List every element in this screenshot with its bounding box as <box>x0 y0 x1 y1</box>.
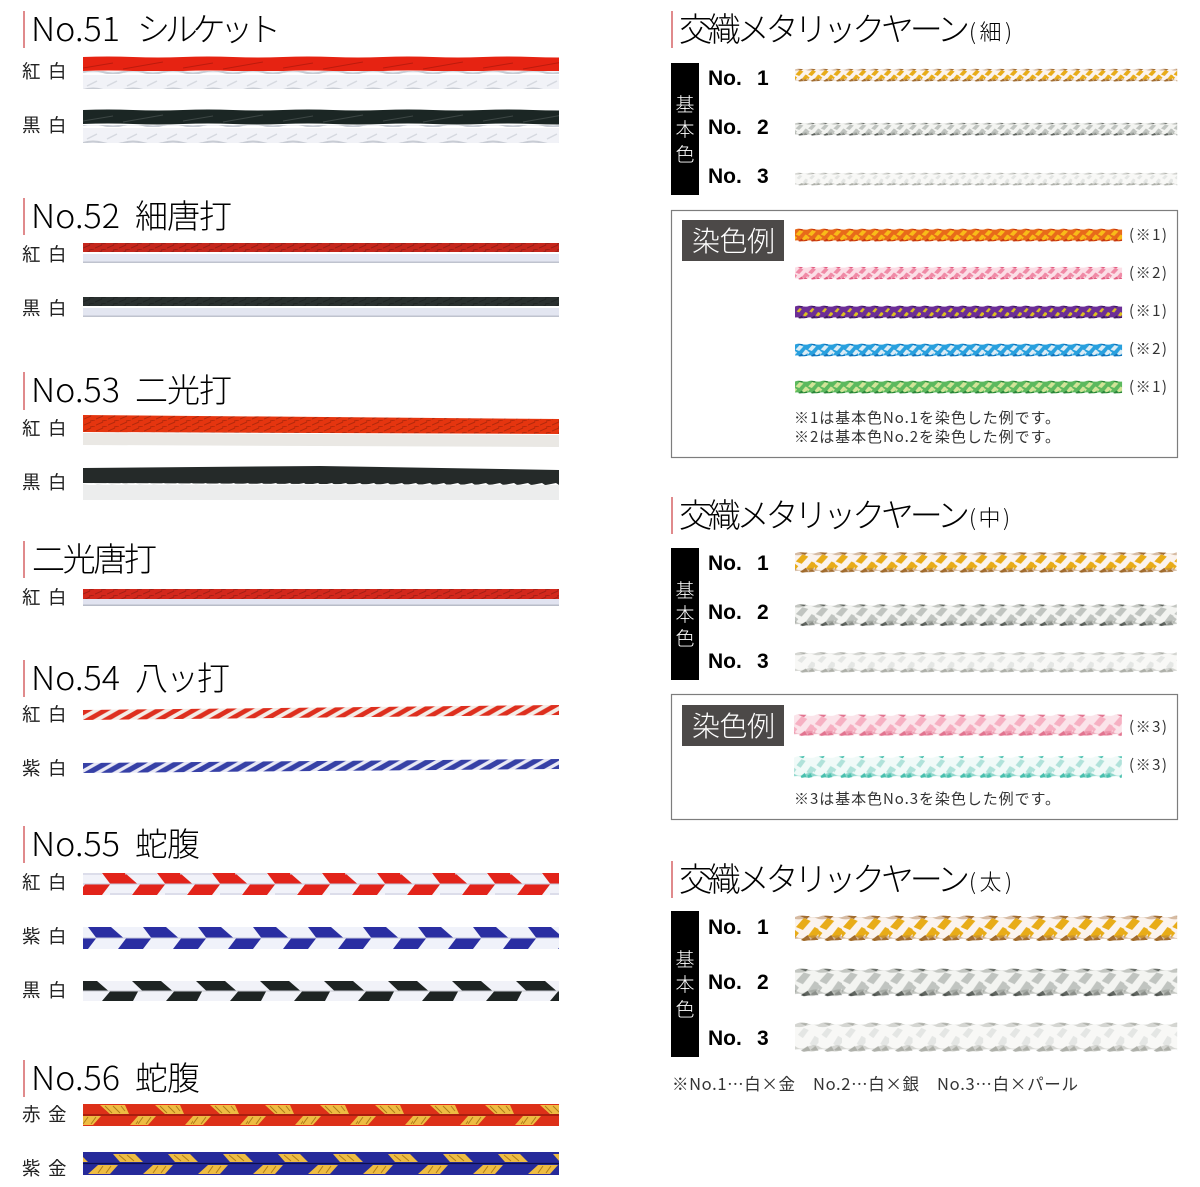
cord: purple and white chevron <box>83 927 559 949</box>
label: 紅白 <box>22 415 67 441</box>
yarn: pink <box>795 266 1122 280</box>
block: 基本色: 本 <box>675 600 695 627</box>
label: No. 3 <box>708 165 769 188</box>
label: 紅白: 白 <box>48 241 67 267</box>
label: 紅白: 白 <box>48 58 67 84</box>
label: No. 2: 2 <box>757 116 769 139</box>
heading: 交織メタリックヤーン(中): (中) <box>969 501 1010 533</box>
label: No. 1: 1 <box>757 67 769 90</box>
yarn: aqua <box>794 755 1122 779</box>
note mark: (※2) <box>1129 338 1167 359</box>
cord: red and white <box>83 243 559 263</box>
panel: dyed examples medium <box>672 694 1178 820</box>
heading: No.52 細唐打 <box>31 190 232 238</box>
section: No.51 シルケット <box>22 3 559 143</box>
yarn: blue <box>795 343 1122 357</box>
label: No. 3 <box>708 650 769 673</box>
label: No. 2 <box>708 116 769 139</box>
block: 基本色: 色 <box>675 140 695 167</box>
section: metallic yarn fine <box>671 3 1178 458</box>
label: No. 3 <box>708 1027 769 1050</box>
label: 黒白: 黒 <box>22 469 41 495</box>
label: 紅白: 紅 <box>22 415 41 441</box>
label: 黒白: 白 <box>48 295 67 321</box>
note: ※3は基本色No.3を染色した例です。 <box>794 788 1060 809</box>
label: 赤金 <box>22 1101 67 1127</box>
footnote <box>672 1071 1078 1095</box>
section: 二光唐打 <box>22 533 559 610</box>
label: No. 3: No. <box>708 165 742 188</box>
heading: 二光唐打: 二光唐打 <box>32 533 157 581</box>
yarn: No.2 silver <box>795 122 1177 136</box>
label: 紅白: 紅 <box>22 869 41 895</box>
yarn: No.3 pearl <box>795 1021 1177 1053</box>
label: No. 2: 2 <box>757 971 769 994</box>
heading: No.53 二光打 <box>31 364 232 412</box>
tag: 染色例: 染色例 <box>692 220 775 260</box>
label: 黒白: 白 <box>48 977 67 1003</box>
label: 紅白: 紅 <box>22 58 41 84</box>
cord: black and white chevron <box>83 981 559 1001</box>
block: 基本色: 本 <box>675 970 695 997</box>
heading: No.56 蛇腹: No.56 <box>31 1052 120 1100</box>
label: 黒白: 白 <box>48 112 67 138</box>
label: 紅白: 白 <box>48 701 67 727</box>
cord: red and white twist <box>83 705 559 720</box>
label: 黒白 <box>22 295 67 321</box>
label: 紅白: 紅 <box>22 241 41 267</box>
label: No. 1: 1 <box>757 552 769 575</box>
heading: No.52 細唐打: 細唐打 <box>135 190 232 238</box>
heading: No.54 八ッ打: No.54 <box>31 652 120 700</box>
note mark: (※1) <box>1129 376 1167 397</box>
section: metallic yarn thick <box>671 853 1177 1095</box>
heading: No.51 シルケット <box>31 3 281 51</box>
note mark: (※3) <box>1129 716 1167 737</box>
block: 基本色 <box>671 63 699 195</box>
block: 基本色: 基 <box>675 576 695 603</box>
cord: black and white <box>83 297 559 317</box>
note mark: (※3) <box>1129 754 1167 775</box>
heading: No.53 二光打: 二光打 <box>135 364 232 412</box>
cord: red and white <box>83 415 559 447</box>
section: No.52 細唐打 <box>22 190 559 321</box>
block: 基本色 <box>671 911 699 1057</box>
label: 紫金: 紫 <box>22 1155 41 1181</box>
yarn: No.1 gold <box>795 68 1177 82</box>
label: 紅白 <box>22 584 67 610</box>
label: No. 1: No. <box>708 67 742 90</box>
label: 黒白: 黒 <box>22 112 41 138</box>
label: 紅白: 白 <box>48 415 67 441</box>
label: No. 2: No. <box>708 116 742 139</box>
block: 基本色: 本 <box>675 115 695 142</box>
block: 基本色: 色 <box>675 624 695 651</box>
heading: No.55 蛇腹 <box>31 818 200 866</box>
heading: 交織メタリックヤーン(細): 交織メタリックヤーン <box>679 3 970 51</box>
cord: purple and gold <box>83 1152 559 1175</box>
cord: black and white <box>83 109 559 143</box>
yarn: purple <box>795 305 1122 319</box>
label: 紫白 <box>22 755 67 781</box>
heading: No.56 蛇腹 <box>31 1052 200 1100</box>
label: No. 2: No. <box>708 971 742 994</box>
cord: red and white chevron <box>83 873 559 895</box>
block: 基本色: 基 <box>675 90 695 117</box>
cord: purple and white twist <box>83 759 559 773</box>
note mark: (※1) <box>1129 224 1167 245</box>
label: No. 3: 3 <box>757 1027 769 1050</box>
label: 紫金 <box>22 1155 67 1181</box>
cord: red and white <box>83 589 559 606</box>
heading: No.56 蛇腹: 蛇腹 <box>135 1052 200 1100</box>
label: 紫金: 金 <box>48 1155 67 1181</box>
label: No. 3: No. <box>708 650 742 673</box>
notes: ※1は基本色No.1を染色した例です。 <box>794 407 1060 428</box>
label: No. 2: 2 <box>757 601 769 624</box>
label: 黒白 <box>22 977 67 1003</box>
block: 基本色 <box>671 548 699 680</box>
label: No. 1: 1 <box>757 916 769 939</box>
cord: black and white <box>83 466 559 500</box>
section: No.55 蛇腹 <box>22 818 559 1003</box>
label: 紫白: 白 <box>48 923 67 949</box>
footnote: No.2…白×銀 <box>813 1071 920 1095</box>
label: No. 2: No. <box>708 601 742 624</box>
heading: 交織メタリックヤーン(細): (細) <box>969 15 1012 47</box>
section: No.56 蛇腹 <box>22 1052 559 1181</box>
footnote: No.3…白×パール <box>937 1071 1078 1095</box>
note mark: (※1) <box>1129 300 1167 321</box>
label: 紫白: 紫 <box>22 755 41 781</box>
label: No. 3: 3 <box>757 650 769 673</box>
yarn: No.3 pearl <box>795 172 1177 186</box>
label: No. 2 <box>708 601 769 624</box>
yarn: green <box>795 380 1122 394</box>
label: 紅白 <box>22 701 67 727</box>
heading: 交織メタリックヤーン(中): 交織メタリックヤーン <box>679 489 970 537</box>
label: 黒白: 黒 <box>22 295 41 321</box>
yarn: orange <box>795 228 1122 242</box>
heading: No.52 細唐打: No.52 <box>31 190 120 238</box>
label: No. 1 <box>708 916 769 939</box>
label: 紫白: 紫 <box>22 923 41 949</box>
label: 紅白 <box>22 869 67 895</box>
panel: dyed examples fine <box>672 210 1178 458</box>
label: 紅白: 白 <box>48 869 67 895</box>
label: 紅白 <box>22 241 67 267</box>
tag: 染色例: 染色例 <box>692 705 775 745</box>
label: 紅白: 紅 <box>22 701 41 727</box>
label: 紅白: 白 <box>48 584 67 610</box>
yarn: No.3 pearl <box>795 651 1177 673</box>
yarn: No.1 gold <box>795 914 1177 942</box>
label: 紫白: 白 <box>48 755 67 781</box>
label: 黒白: 白 <box>48 469 67 495</box>
heading: No.53 二光打: No.53 <box>31 364 120 412</box>
label: No. 1 <box>708 552 769 575</box>
yarn: No.1 gold <box>795 551 1177 573</box>
label: No. 1: No. <box>708 916 742 939</box>
cord: red and gold <box>83 1104 559 1126</box>
heading: 交織メタリックヤーン(太): (太) <box>969 865 1012 897</box>
section: metallic yarn medium <box>671 489 1178 820</box>
heading: No.51 シルケット: No.51 <box>31 3 120 51</box>
notes <box>794 407 1060 447</box>
section: No.54 八ッ打 <box>22 652 559 781</box>
block: 基本色: 基 <box>675 945 695 972</box>
label: No. 1 <box>708 67 769 90</box>
label: 紫白 <box>22 923 67 949</box>
label: No. 3: 3 <box>757 165 769 188</box>
yarn: No.2 silver <box>795 967 1177 997</box>
label: No. 2 <box>708 971 769 994</box>
label: 赤金: 金 <box>48 1101 67 1127</box>
label: 紅白: 紅 <box>22 584 41 610</box>
heading: 交織メタリックヤーン(太): 交織メタリックヤーン <box>679 853 970 901</box>
notes: ※2は基本色No.2を染色した例です。 <box>794 426 1060 447</box>
heading: No.54 八ッ打: 八ッ打 <box>135 652 230 700</box>
label: 紅白 <box>22 58 67 84</box>
heading: No.51 シルケット: シルケット <box>137 3 281 51</box>
label: 黒白 <box>22 112 67 138</box>
heading: No.54 八ッ打 <box>31 652 230 700</box>
section: No.53 二光打 <box>22 364 559 500</box>
block: 基本色: 色 <box>675 995 695 1022</box>
cord: red and white <box>83 56 559 89</box>
heading: No.55 蛇腹: No.55 <box>31 818 120 866</box>
label: No. 1: No. <box>708 552 742 575</box>
label: 赤金: 赤 <box>22 1101 41 1127</box>
label: 黒白: 黒 <box>22 977 41 1003</box>
yarn: No.2 silver <box>795 603 1177 627</box>
label: 黒白 <box>22 469 67 495</box>
label: No. 3: No. <box>708 1027 742 1050</box>
note mark: (※2) <box>1129 262 1167 283</box>
yarn: pink <box>794 713 1122 737</box>
footnote: ※No.1…白×金 <box>672 1071 795 1095</box>
heading: No.55 蛇腹: 蛇腹 <box>135 818 200 866</box>
